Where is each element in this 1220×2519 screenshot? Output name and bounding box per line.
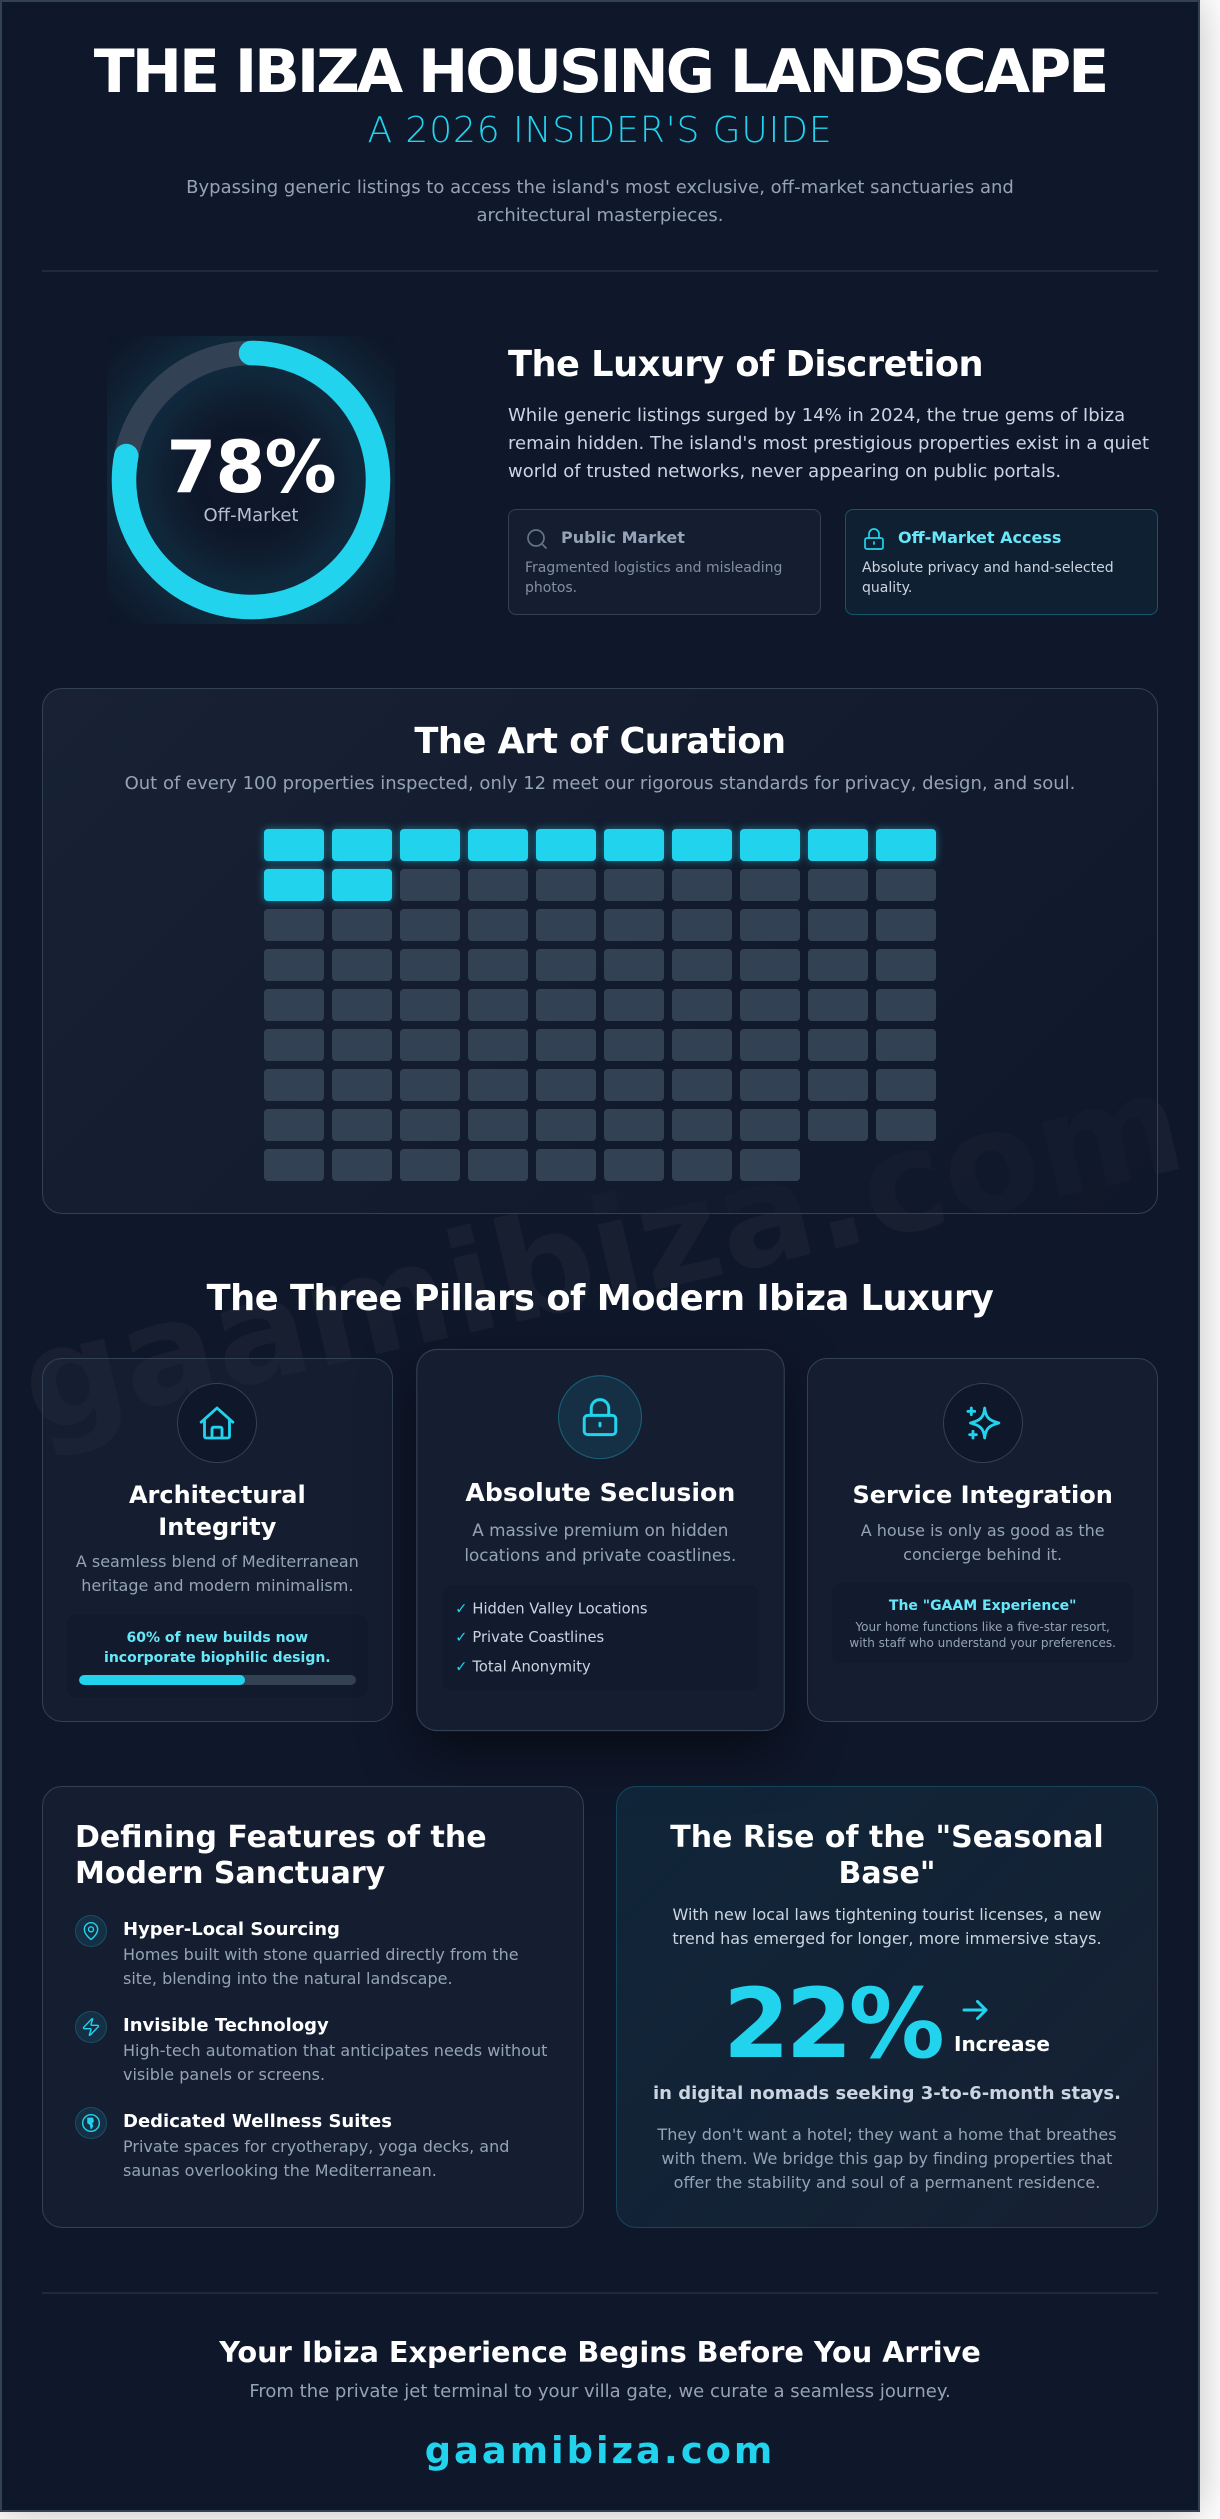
feature text: Homes built with stone quarried directly from the: [123, 1944, 519, 1964]
card text: A seamless blend of Mediterranean: [76, 1552, 359, 1571]
callout text: [849, 1620, 1116, 1650]
feature title: Invisible Technology: [123, 2014, 329, 2036]
paragraph: [657, 2124, 1117, 2192]
card title: Architectural: [129, 1480, 306, 1508]
heading: The Art of Curation: [414, 720, 786, 762]
footer text: From the private jet terminal to your villa gate, we curate a seamless journey.: [249, 2381, 951, 2402]
icon: map pin: [75, 1915, 107, 1947]
check item: ✓: [455, 1630, 467, 1646]
feature text: Private spaces for cryotherapy, yoga decks, and: [123, 2136, 509, 2156]
icon: lightning: [75, 2011, 107, 2043]
card text: [862, 560, 1114, 596]
paragraph: [672, 1905, 1102, 1948]
title: THE IBIZA HOUSING LANDSCAPE: [94, 37, 1106, 107]
card title: Service Integration: [852, 1480, 1113, 1508]
card: service integration: [807, 1358, 1158, 1722]
icon: sparkles: [943, 1383, 1023, 1463]
website: gaamibiza.com: [425, 2429, 775, 2472]
intro text: [186, 176, 1014, 226]
header: [94, 37, 1106, 226]
card text: quality.: [862, 580, 912, 596]
donut chart: 78% off-market: [107, 336, 395, 624]
feature text: High-tech automation that anticipates needs without: [123, 2040, 547, 2060]
card title: Off-Market Access: [898, 528, 1061, 547]
card: architectural integrity: [42, 1358, 393, 1722]
feature title: Hyper-Local Sourcing: [123, 1918, 340, 1940]
checklist: [442, 1585, 758, 1690]
paragraph: While generic listings surged by 14% in 2024, the true gems of Ibiza: [508, 404, 1125, 426]
card text: [464, 1520, 736, 1565]
check item: Hidden Valley Locations: [472, 1601, 647, 1617]
donut label: Off-Market: [204, 504, 298, 526]
stat description: in digital nomads seeking 3-to-6-month stays.: [653, 2082, 1121, 2104]
check item: Private Coastlines: [472, 1630, 604, 1646]
feature text: [123, 2040, 547, 2084]
card text: Fragmented logistics and misleading: [525, 560, 782, 576]
card text: [525, 560, 782, 596]
card text: locations and private coastlines.: [464, 1545, 736, 1565]
stat text: 60% of new builds now: [127, 1630, 308, 1646]
feature text: visible panels or screens.: [123, 2064, 325, 2084]
icon: search: [527, 529, 547, 549]
panel: defining features: [42, 1786, 584, 2228]
paragraph: [508, 404, 1149, 482]
check item: ✓: [455, 1659, 467, 1676]
card text: concierge behind it.: [903, 1544, 1062, 1564]
stat text: [104, 1630, 331, 1666]
icon: arrow: [962, 2000, 988, 2020]
stat label: Increase: [954, 2032, 1050, 2056]
card text: Absolute privacy and hand-selected: [862, 560, 1114, 576]
subheading: Out of every 100 properties inspected, only 12 meet our rigorous standards for privacy, design, and soul.: [125, 773, 1075, 794]
card text: heritage and modern minimalism.: [81, 1576, 353, 1595]
heading: The Rise of the "Seasonal: [670, 1820, 1104, 1855]
card title: [129, 1480, 306, 1540]
heading: [670, 1820, 1104, 1891]
donut value: 78%: [166, 425, 336, 509]
heading: Defining Features of the: [75, 1820, 487, 1855]
card text: A massive premium on hidden: [472, 1520, 728, 1539]
watermark: gaamibiza.com: [6, 1041, 1198, 1466]
card text: A house is only as good as the: [861, 1520, 1105, 1540]
paragraph: remain hidden. The island's most prestigious properties exist in a quiet: [508, 433, 1149, 454]
icon: lock: [558, 1375, 642, 1459]
heading: Base": [839, 1856, 935, 1891]
callout text: Your home functions like a five-star resort,: [855, 1620, 1110, 1634]
footer: [219, 2335, 981, 2472]
stat value: 22%: [723, 1968, 941, 2080]
panel: seasonal base: [616, 1786, 1158, 2228]
icon: house: [177, 1383, 257, 1463]
paragraph: trend has emerged for longer, more immersive stays.: [672, 1929, 1102, 1948]
feature text: site, blending into the natural landscape.: [123, 1968, 453, 1988]
progress bar: 60%: [79, 1675, 356, 1685]
card title: Integrity: [158, 1512, 276, 1540]
feature title: Dedicated Wellness Suites: [123, 2110, 392, 2132]
card: public market: [508, 509, 821, 615]
stat box: [67, 1615, 368, 1697]
paragraph: with them. We bridge this gap by finding properties that: [662, 2148, 1112, 2168]
heading: [75, 1820, 487, 1891]
callout text: with staff who understand your preferences.: [849, 1636, 1116, 1650]
intro text: architectural masterpieces.: [476, 205, 724, 226]
card: off-market access: [845, 509, 1158, 615]
icon: lock: [864, 528, 884, 550]
heading: three pillars: The Three Pillars of Modern Ibiza Luxury: [207, 1278, 993, 1319]
feature text: [123, 2136, 509, 2180]
card title: Absolute Seclusion: [465, 1478, 735, 1507]
check item: ✓: [455, 1601, 467, 1617]
paragraph: offer the stability and soul of a permanent residence.: [674, 2172, 1100, 2192]
card text: photos.: [525, 580, 577, 596]
card text: [76, 1552, 359, 1595]
paragraph: They don't want a hotel; they want a home that breathes: [657, 2124, 1117, 2144]
panel: art of curation: [42, 688, 1158, 1214]
callout title: The "GAAM Experience": [889, 1598, 1076, 1614]
stat text: incorporate biophilic design.: [104, 1650, 331, 1666]
heading: Modern Sanctuary: [75, 1856, 385, 1891]
section: luxury of discretion: [508, 344, 1158, 615]
callout: GAAM experience: [832, 1583, 1133, 1663]
card: absolute seclusion: [416, 1349, 784, 1731]
paragraph: world of trusted networks, never appearing on public portals.: [508, 461, 1061, 482]
footer heading: Your Ibiza Experience Begins Before You Arrive: [219, 2335, 981, 2369]
waffle chart: 12 of 88: [259, 824, 941, 1181]
check item: Total Anonymity: [472, 1659, 590, 1676]
card text: [860, 1520, 1105, 1564]
paragraph: With new local laws tightening tourist licenses, a new: [672, 1905, 1102, 1924]
feature text: saunas overlooking the Mediterranean.: [123, 2160, 437, 2180]
subtitle: A 2026 INSIDER'S GUIDE: [368, 110, 832, 151]
card title: Public Market: [561, 528, 685, 547]
heading: The Luxury of Discretion: [508, 344, 983, 385]
intro text: Bypassing generic listings to access the island's most exclusive, off-market sanctuaries and: [186, 176, 1014, 198]
feature text: [123, 1944, 519, 1988]
icon: globe: [75, 2107, 107, 2139]
